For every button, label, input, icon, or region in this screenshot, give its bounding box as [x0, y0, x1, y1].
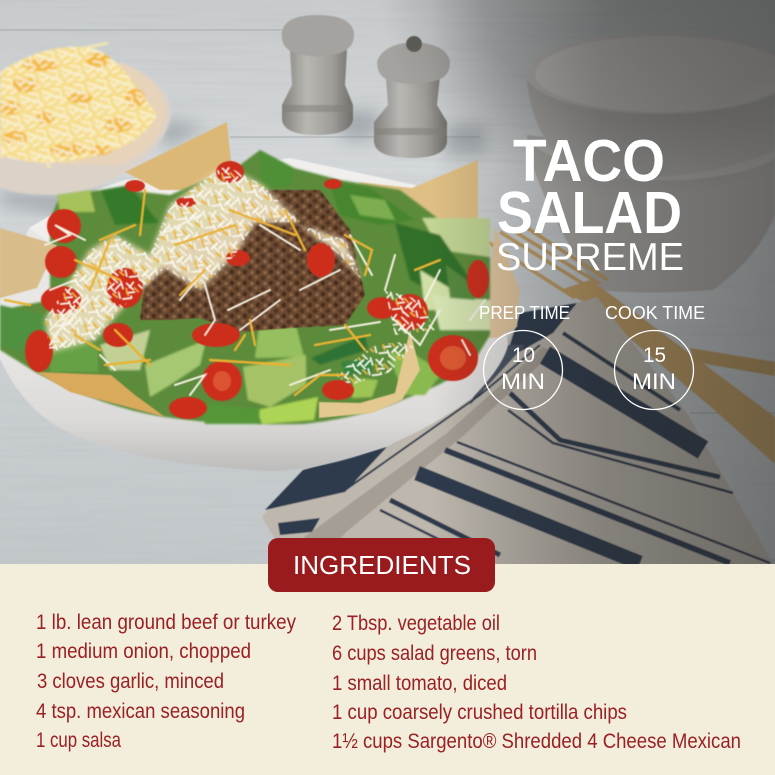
chips: tortilla chips behind salad [125, 122, 520, 338]
bowl of shredded cheese [0, 43, 171, 195]
prep time badge: 10 [512, 344, 535, 367]
ingredients list: left column: 1 lb. lean ground beef or turkey [36, 611, 296, 634]
salad: tortilla chips in front [0, 228, 420, 418]
ingredients list: left column: 1 medium onion, chopped [36, 640, 251, 663]
prep time badge [479, 303, 570, 410]
cook time badge: 15 [643, 344, 666, 367]
ingredients list: right column: 1 cup coarsely crushed tortilla chips [332, 701, 627, 724]
icon: gold forks [488, 226, 775, 464]
shade: dark overlay behind title [430, 0, 775, 565]
title: SALAD [497, 180, 682, 246]
title: TACO [513, 128, 665, 194]
shade: top right darkening [380, 0, 775, 200]
cook time badge: MIN [632, 369, 676, 394]
photo: taco salad on wooden table [0, 0, 775, 565]
cook time badge [605, 303, 705, 410]
towel: navy striped cloth [262, 297, 773, 565]
title: SUPREME [496, 236, 684, 279]
ingredients list: left column: 1 cup salsa [36, 729, 121, 752]
ingredients list: right column: 1 small tomato, diced [332, 672, 507, 695]
prep time badge: PREP TIME [479, 303, 570, 323]
ingredients list: right column [332, 612, 741, 753]
salad: lettuce base [0, 150, 490, 424]
shadows on table [0, 110, 485, 215]
salad: cherry tomatoes [25, 161, 489, 419]
salad: pale cheese bed [45, 165, 362, 352]
ingredients list: right column: 2 Tbsp. vegetable oil [332, 612, 500, 635]
salad: shredded white and yellow cheese [5, 165, 485, 395]
ingredients heading pill: INGREDIENTS [293, 550, 471, 580]
prep time badge: MIN [501, 369, 545, 394]
icon: pepper mill [374, 36, 450, 158]
bowls: stacked white bowls [525, 32, 775, 292]
ingredients heading pill [268, 538, 495, 592]
ingredients list: left column [36, 611, 296, 752]
ingredients list: left column: 3 cloves garlic, minced [37, 670, 224, 693]
panel: ingredients background [0, 564, 775, 775]
icon: salt shaker [282, 15, 354, 135]
ingredients list: right column: 6 cups salad greens, torn [332, 642, 537, 665]
title [496, 128, 684, 279]
salad: ground beef [140, 190, 365, 332]
ingredients list: left column: 4 tsp. mexican seasoning [36, 700, 245, 723]
cook time badge: COOK TIME [605, 303, 705, 323]
plate: white serving bowl [0, 158, 508, 471]
